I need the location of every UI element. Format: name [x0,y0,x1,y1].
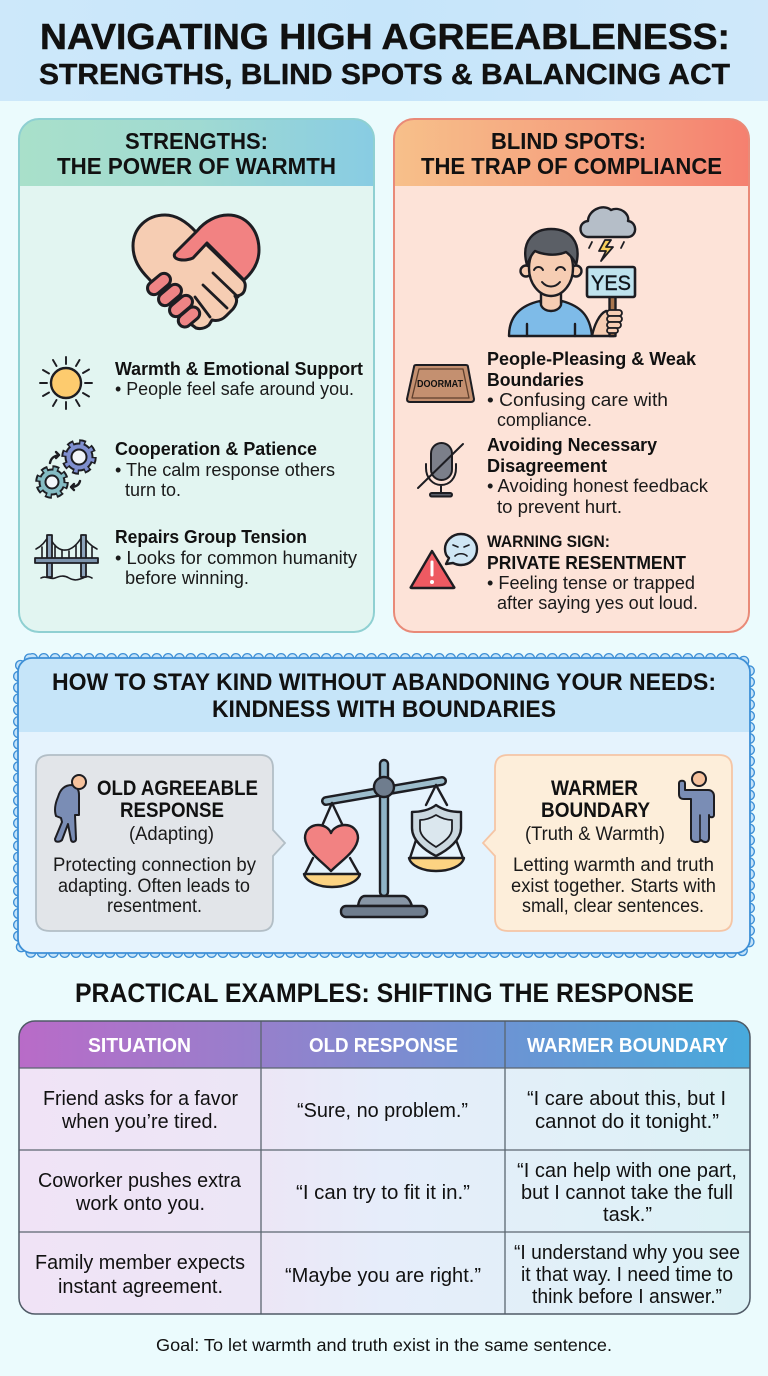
strength item: warmth: • People feel safe around you. [115,378,354,399]
table row 1: when you’re tired. [61,1111,218,1133]
blind spots heading [421,128,722,179]
table header row [88,1035,729,1057]
title line 2: STRENGTHS, BLIND SPOTS & BALANCING ACT [39,59,730,91]
blind spots heading: BLIND SPOTS: [491,128,646,154]
icon: balance scale with heart and shield [304,760,464,917]
strengths heading [57,128,336,179]
callout: warmer boundary: (Truth & Warmth) [525,824,665,845]
table: practical examples [19,1021,750,1314]
table row 3 [35,1242,740,1308]
table row 3: it that way. I need time to [521,1264,733,1286]
blind spot item: avoiding disagreement: • Avoiding honest feedback [487,475,709,496]
blind spot item: warning sign: WARNING SIGN: [487,532,610,551]
table row 2: but I cannot take the full [521,1182,733,1204]
table row 2: task.” [603,1204,652,1226]
icon: smiling person holding yes sign under storm cloud [509,207,635,336]
panel: kindness with boundaries [18,658,750,953]
blind spot item: avoiding disagreement: Disagreement [487,456,607,476]
section heading [52,669,716,723]
goal footer: Goal: To let warmth and truth exist in the same sentence. [156,1335,612,1355]
strength item: repairs: Repairs Group Tension [115,527,307,547]
icon: sun [40,357,92,409]
icon: doormat: DOORMAT [417,378,464,390]
table row 1: “I care about this, but I [527,1088,726,1110]
callout: old agreeable response: adapting. Often leads to [58,876,250,897]
icon: handshake heart [133,215,259,330]
strengths heading: STRENGTHS: [125,128,268,154]
table row 3: instant agreement. [58,1276,223,1298]
heading: practical examples: PRACTICAL EXAMPLES: SHIFTING THE RESPONSE [75,978,694,1008]
table row 2 [38,1160,737,1226]
table row 3: “I understand why you see [514,1242,740,1264]
strength item: repairs [115,527,358,588]
table header row: OLD RESPONSE [309,1035,458,1057]
icon: muted microphone [418,443,463,496]
blind spot item: people pleasing: People-Pleasing & Weak [487,349,697,369]
table header row: WARMER BOUNDARY [527,1035,729,1057]
callout: old agreeable response [36,755,285,931]
strength item: cooperation [115,439,335,500]
table row 1: “Sure, no problem.” [297,1100,468,1122]
blind spot item: avoiding disagreement: to prevent hurt. [497,496,622,517]
blind spot item: warning sign: • Feeling tense or trapped [487,572,695,593]
blind spot item: warning sign: PRIVATE RESENTMENT [487,553,686,573]
blind spot item: avoiding disagreement: Avoiding Necessary [487,435,657,455]
table row 3: “Maybe you are right.” [285,1265,481,1287]
blind spots heading: THE TRAP OF COMPLIANCE [421,153,722,179]
callout: old agreeable response: Protecting connection by [53,855,256,876]
blind spot item: avoiding disagreement [487,435,709,517]
table row 2: work onto you. [75,1193,205,1215]
strengths heading: THE POWER OF WARMTH [57,153,336,179]
blind spot item: people pleasing: • Confusing care with [487,389,668,410]
blind spot item: warning sign [487,532,698,613]
callout: warmer boundary: BOUNDARY [541,799,650,822]
table row 1 [43,1088,726,1133]
title line 1: NAVIGATING HIGH AGREEABLENESS: [40,16,730,57]
icon: warning triangle and sad speech bubble [411,534,477,588]
callout: warmer boundary: exist together. Starts with [511,876,716,897]
strength item: warmth [115,359,363,399]
section heading: KINDNESS WITH BOUNDARIES [212,696,556,723]
table row 3: Family member expects [35,1252,245,1274]
icon: bridge [35,535,98,580]
icon: upright person with raised hand [679,772,714,842]
blind spot item: people pleasing: Boundaries [487,370,584,390]
table row 2: “I can help with one part, [517,1160,737,1182]
table row 3: think before I answer.” [532,1286,722,1308]
panel: strengths [19,119,374,632]
strength item: repairs: • Looks for common humanity [115,547,358,568]
strength item: cooperation: Cooperation & Patience [115,439,317,459]
callout: old agreeable response: (Adapting) [129,824,214,845]
panel: blind spots [394,119,749,632]
section heading: HOW TO STAY KIND WITHOUT ABANDONING YOUR NEEDS: [52,669,716,696]
strength item: cooperation: turn to. [125,479,181,500]
table row 2: Coworker pushes extra [38,1170,242,1192]
title banner [0,0,768,101]
callout: warmer boundary: Letting warmth and truth [513,855,714,876]
callout: old agreeable response: resentment. [107,896,202,917]
icon: gears [39,443,93,495]
sign label: YES [591,272,631,295]
table row 1: cannot do it tonight.” [535,1111,719,1133]
callout: warmer boundary: small, clear sentences. [522,896,704,917]
icon: doormat [407,365,474,402]
callout: warmer boundary: WARMER [551,777,638,800]
callout: old agreeable response: RESPONSE [120,799,224,822]
blind spot item: people pleasing: compliance. [497,409,592,430]
table header row: SITUATION [88,1035,191,1057]
table row 2: “I can try to fit it in.” [296,1182,470,1204]
strength item: warmth: Warmth & Emotional Support [115,359,363,379]
icon: slumped person [55,775,86,842]
callout: old agreeable response: OLD AGREEABLE [97,777,258,800]
strength item: cooperation: • The calm response others [115,459,335,480]
blind spot item: warning sign: after saying yes out loud. [497,592,698,613]
strength item: repairs: before winning. [125,567,249,588]
blind spot item: people pleasing [487,349,697,430]
table row 1: Friend asks for a favor [43,1088,238,1110]
callout: warmer boundary [483,755,732,931]
